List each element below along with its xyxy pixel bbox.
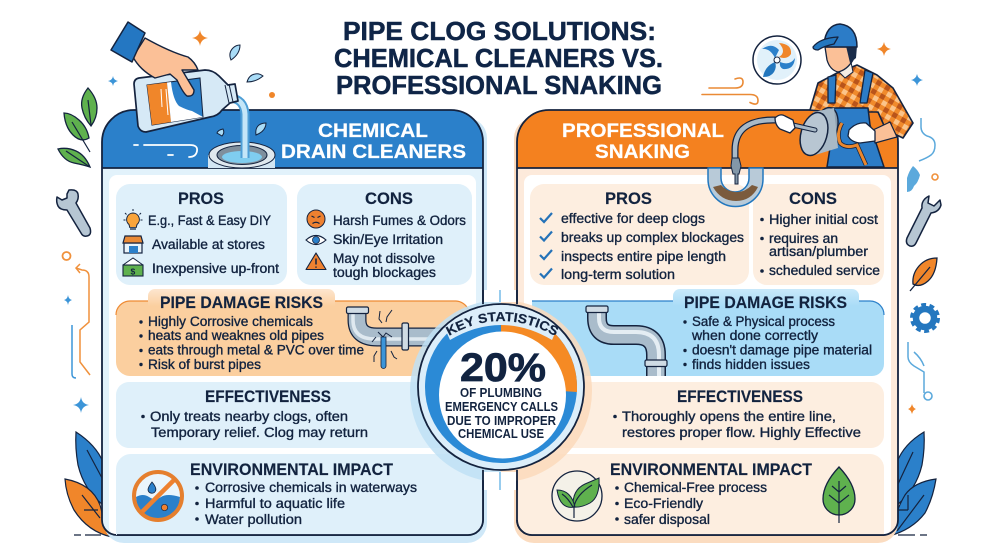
chemical pipe damage risks: PIPE DAMAGE RISKS — [160, 294, 323, 312]
illustration: sparkles and drops, left — [108, 30, 275, 136]
illustration: u-trap with blockage — [708, 168, 763, 207]
chemical pros: E.g., Fast & Easy DIY — [148, 213, 271, 228]
professional cons: artisan/plumber — [769, 244, 869, 259]
icon: green leaf — [823, 467, 855, 523]
professional pipe damage risks: finds hidden issues — [692, 357, 810, 372]
statistic value: 20% — [460, 346, 546, 390]
chemical cons: Harsh Fumes & Odors — [333, 213, 466, 228]
chemical environmental impact: ENVIRONMENTAL IMPACT — [190, 461, 393, 479]
icon: no water pollution — [134, 472, 182, 520]
illustration: water stream highlight — [230, 98, 245, 158]
professional pros: inspects entire pipe length — [561, 249, 726, 264]
illustration: wind swirls — [702, 78, 758, 104]
icon: cracked leaking pipe — [346, 307, 445, 369]
title: PROFESSIONAL SNAKING — [336, 70, 662, 100]
chemical pipe damage risks: Highly Corrosive chemicals — [148, 314, 313, 329]
professional effectiveness — [532, 382, 884, 448]
icon: bottom left leaves — [65, 432, 112, 537]
icon: left leaves — [58, 88, 97, 167]
professional effectiveness: EFFECTIVENESS — [677, 388, 803, 406]
icon: angry face — [307, 210, 325, 228]
professional cons: requires an — [769, 231, 838, 246]
chemical pros: Available at stores — [152, 237, 265, 252]
professional effectiveness: restores proper flow. Highly Effective — [622, 425, 861, 440]
badge label: KEY STATISTICS — [446, 312, 558, 336]
icon: left wrench — [57, 190, 91, 236]
chemical environmental impact: Harmful to aquatic life — [205, 496, 345, 511]
panel heading: chemical: DRAIN CLEANERS — [281, 142, 466, 163]
professional pros: PROS — [605, 190, 652, 208]
panel heading: professional: SNAKING — [595, 142, 690, 163]
icon: intact pipe — [586, 306, 667, 376]
icon: warning triangle — [306, 253, 326, 270]
professional cons: CONS — [789, 190, 837, 208]
chemical effectiveness: Only treats nearby clogs, often — [150, 409, 348, 424]
chemical pipe damage risks — [116, 289, 470, 376]
professional pipe damage risks: when done correctly — [691, 328, 818, 343]
statistic caption: OF PLUMBING — [460, 386, 542, 400]
icon: money: $ — [130, 266, 136, 276]
professional cons: scheduled service — [769, 263, 880, 278]
chemical effectiveness — [116, 382, 476, 448]
panel: professional snaking — [514, 110, 898, 543]
right decorations: sparkles, squiggles — [877, 42, 938, 414]
title: PIPE CLOG SOLUTIONS: — [343, 16, 656, 46]
illustration: chemical bottle — [134, 70, 238, 132]
illustration: plumber — [810, 24, 913, 167]
icon: gear — [912, 304, 938, 332]
illustration: hand pouring — [111, 22, 198, 96]
chemical pipe damage risks: eats through metal & PVC over time — [148, 342, 364, 358]
panel heading: chemical — [281, 121, 466, 163]
illustration: drain with swirl — [134, 142, 275, 168]
professional pros: effective for deep clogs — [561, 211, 705, 226]
professional cons — [753, 184, 884, 285]
professional environmental impact: Chemical-Free process — [624, 480, 767, 495]
professional cons: Higher initial cost — [769, 212, 878, 227]
panel heading: professional — [562, 121, 724, 163]
professional pipe damage risks: PIPE DAMAGE RISKS — [684, 294, 847, 312]
statistic caption — [445, 386, 558, 441]
chemical pros: Inexpensive up-front — [152, 261, 279, 276]
icon: lightbulb — [124, 209, 142, 230]
key statistics badge — [410, 290, 592, 490]
professional environmental impact: safer disposal — [624, 512, 710, 527]
professional environmental impact: Eco-Friendly — [624, 496, 703, 511]
chemical cons: May not dissolve — [333, 251, 435, 266]
professional effectiveness: Thoroughly opens the entire line, — [622, 409, 836, 424]
chemical environmental impact: Corrosive chemicals in waterways — [205, 480, 417, 495]
professional pros — [530, 184, 749, 285]
illustration: fan icon — [753, 36, 801, 84]
chemical pros — [116, 184, 287, 285]
title — [334, 16, 663, 100]
panel heading: professional: PROFESSIONAL — [562, 121, 724, 142]
chemical cons — [297, 184, 472, 285]
chemical effectiveness: EFFECTIVENESS — [205, 388, 331, 406]
chemical pipe damage risks: Risk of burst pipes — [148, 357, 261, 372]
professional pipe damage risks: doesn't damage pipe material — [692, 342, 872, 358]
statistic caption: DUE TO IMPROPER — [447, 414, 556, 428]
title: CHEMICAL CLEANERS VS. — [334, 43, 663, 73]
chemical effectiveness: Temporary relief. Clog may return — [151, 425, 368, 440]
professional pros: long-term solution — [561, 267, 675, 282]
chemical pipe damage risks: heats and weaknes old pipes — [148, 328, 324, 343]
professional pipe damage risks: Safe & Physical process — [692, 314, 835, 329]
professional pipe damage risks — [532, 289, 884, 376]
chemical environmental impact: Water pollution — [205, 512, 302, 527]
panel heading: chemical: CHEMICAL — [318, 121, 428, 142]
left connector lines — [62, 252, 90, 413]
illustration: drain snake drum and hose — [731, 105, 843, 184]
statistic caption: CHEMICAL USE — [458, 427, 544, 441]
panel: chemical drain cleaners — [102, 110, 487, 543]
icon: store — [123, 236, 143, 253]
chemical cons: Skin/Eye Irritation — [333, 232, 443, 247]
icon: seedling in circle — [552, 471, 602, 521]
statistic caption: EMERGENCY CALLS — [445, 400, 558, 414]
chemical cons: CONS — [365, 190, 413, 208]
professional environmental impact: ENVIRONMENTAL IMPACT — [610, 461, 812, 479]
chemical cons: tough blockages — [333, 265, 436, 280]
professional environmental impact — [517, 454, 884, 535]
icon: bottom right leaves — [889, 432, 936, 536]
illustration: water stream — [230, 98, 245, 158]
icon: money — [123, 258, 143, 276]
icon: eye — [306, 236, 326, 244]
chemical environmental impact — [116, 454, 483, 535]
icon: right orange leaf — [910, 258, 937, 291]
professional pros: breaks up complex blockages — [561, 230, 744, 245]
chemical pros: PROS — [178, 190, 224, 208]
icon: right wrench — [906, 196, 941, 246]
